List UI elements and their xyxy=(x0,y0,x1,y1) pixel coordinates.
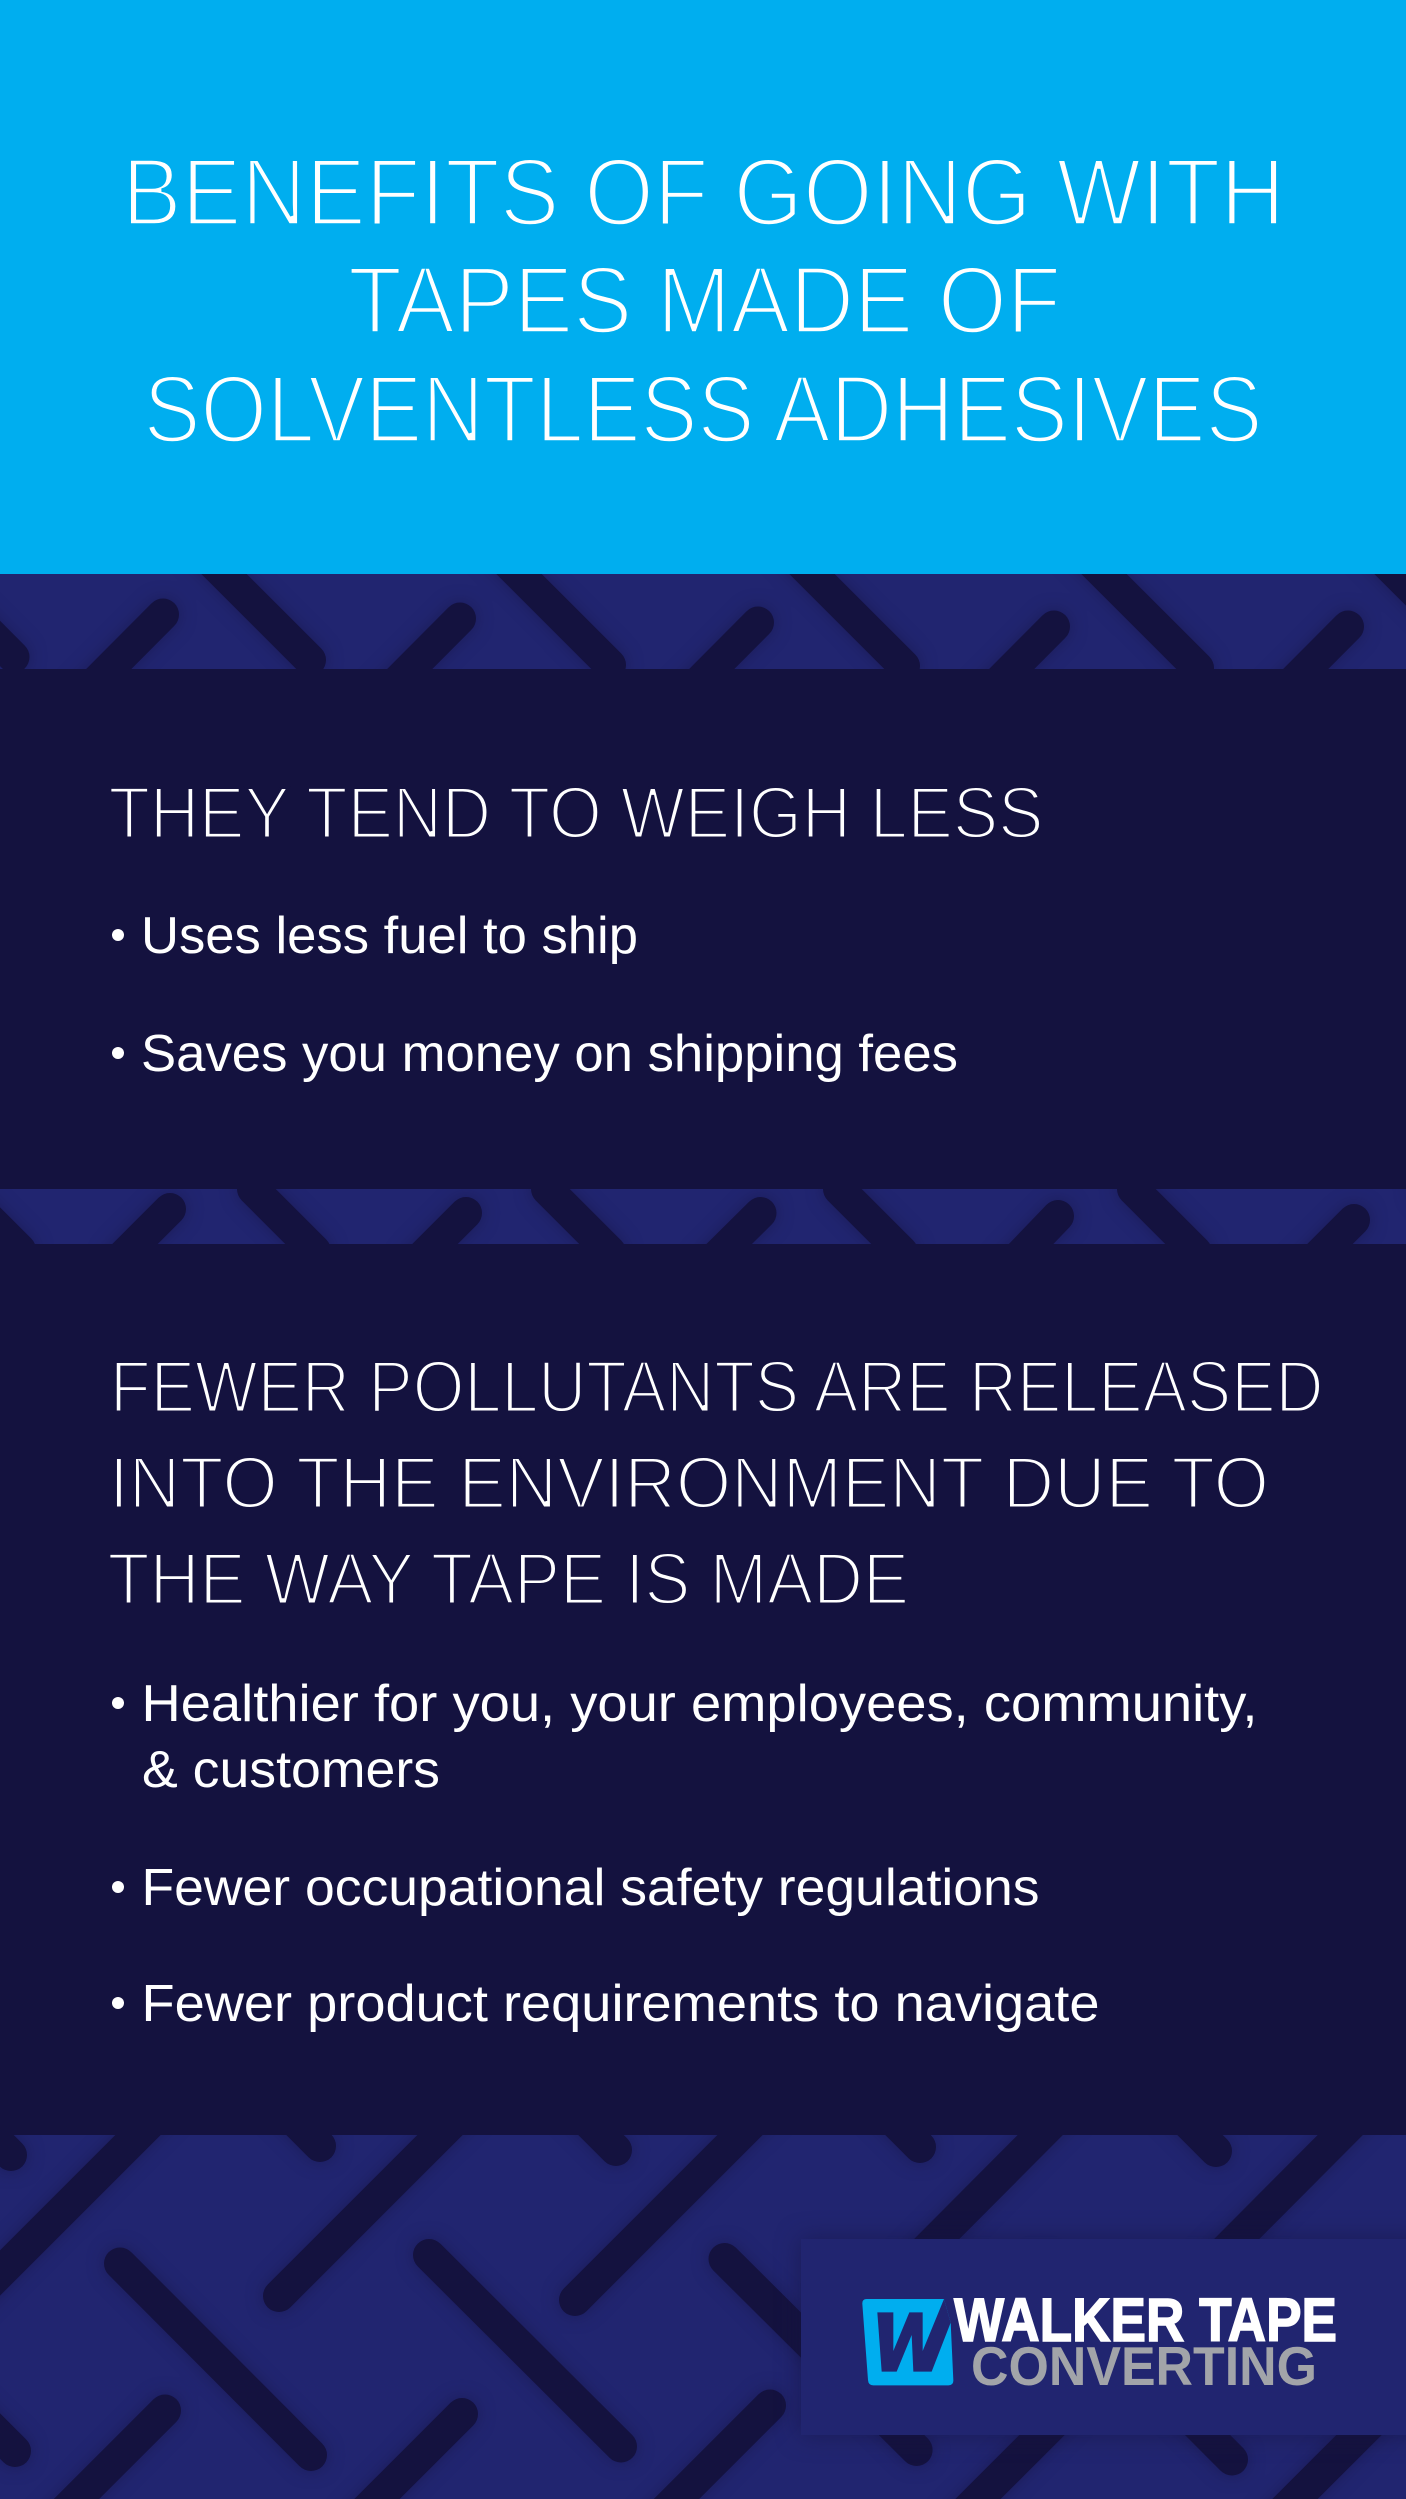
logo: Walker Tape Converting xyxy=(862,2286,1337,2397)
header banner xyxy=(0,0,1406,574)
wordmark: Walker Tape: WALKER TAPE xyxy=(954,2286,1337,2354)
heading: weigh less: THEY TEND TO WEIGH LESS xyxy=(108,773,1044,854)
icon: W tile xyxy=(862,2299,953,2385)
panel: they tend to weigh less xyxy=(0,669,1406,1189)
heading: fewer pollutants xyxy=(108,1347,1324,1620)
bullet: safety regulations: Fewer occupational safety regulations xyxy=(142,1859,1040,1917)
panel: fewer pollutants xyxy=(0,1244,1406,2135)
bullet: fuel: Uses less fuel to ship xyxy=(141,907,638,965)
title: BENEFITS OF GOING WITH xyxy=(122,139,1285,246)
wordmark: Converting: CONVERTING xyxy=(971,2335,1317,2397)
title: TAPES MADE OF xyxy=(348,247,1061,354)
title: SOLVENTLESS ADHESIVES xyxy=(144,356,1262,463)
title xyxy=(122,139,1285,463)
bullet: healthier: Healthier for you, your employees, community, xyxy=(142,1675,1258,1733)
heading: fewer pollutants: THE WAY TAPE IS MADE xyxy=(108,1539,909,1620)
bullet: healthier xyxy=(112,1675,1258,1799)
heading: fewer pollutants: INTO THE ENVIRONMENT DUE TO xyxy=(109,1443,1269,1524)
bullet: shipping fees: Saves you money on shipping fees xyxy=(141,1025,958,1083)
bullet: product requirements: Fewer product requirements to navigate xyxy=(142,1975,1100,2033)
bullet: healthier: & customers xyxy=(142,1741,440,1799)
heading: fewer pollutants: FEWER POLLUTANTS ARE RELEASED xyxy=(110,1347,1324,1428)
logo panel xyxy=(801,2239,1406,2435)
